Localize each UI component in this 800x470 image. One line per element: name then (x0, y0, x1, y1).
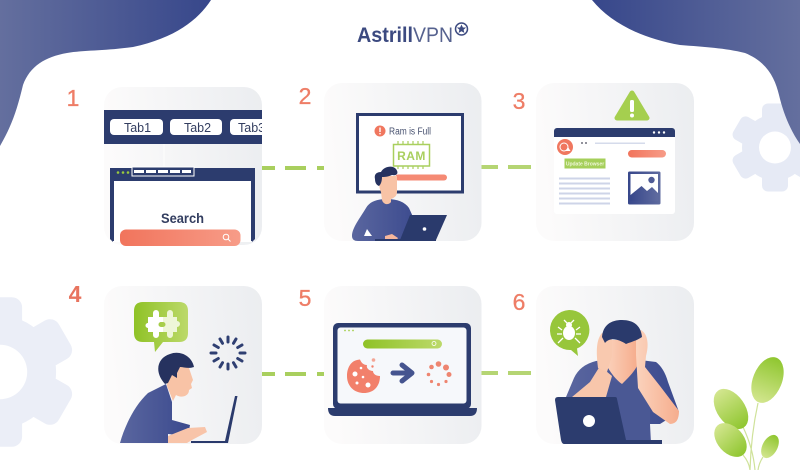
panel 3: update browser warning (536, 83, 694, 241)
logo: Astrill (357, 23, 413, 47)
left gear (0, 297, 76, 447)
number 4: 4 (69, 281, 82, 307)
logo: VPN (413, 23, 453, 47)
panel 2: RAM is full (324, 83, 482, 241)
logo (357, 23, 468, 47)
RAM chip: RAM (397, 149, 426, 163)
laptop (555, 397, 662, 444)
right gear (730, 104, 800, 192)
browser window (554, 128, 675, 214)
cookie (347, 358, 380, 393)
puzzle speech bubble (134, 302, 188, 352)
laptop (375, 215, 447, 241)
panel 1: browser tabs and search (104, 87, 265, 246)
number 6: 6 (513, 289, 525, 315)
panel 6: frustrated user with bug (536, 286, 694, 444)
connector dashes 2 to 3 (481, 165, 531, 169)
frustrated person (555, 320, 679, 444)
browser window (110, 167, 255, 242)
browser window: Search (161, 210, 204, 226)
bug speech bubble (550, 310, 589, 356)
plant (707, 352, 790, 470)
warning triangle (617, 93, 647, 118)
leaves (707, 352, 790, 463)
connector dashes 5 to 6 (481, 371, 531, 375)
tab bar: Tab2 (184, 121, 211, 135)
number 3: 3 (513, 88, 525, 114)
laptop (191, 396, 238, 443)
connector dashes 1 to 2 (262, 166, 324, 170)
number 1: 1 (67, 85, 79, 111)
person typing (120, 353, 238, 443)
green search bar (363, 340, 442, 348)
connector dashes 4 to 5 (262, 372, 324, 376)
image icon (628, 172, 660, 204)
top-left blob (0, 0, 211, 146)
top-right blob (592, 0, 800, 144)
logo star badge (456, 23, 468, 35)
panel 5: clear cookies laptop (324, 286, 482, 444)
person at laptop (352, 167, 447, 241)
number 2: 2 (299, 83, 311, 109)
loading dots (427, 361, 452, 386)
tab bar: Tab3 (238, 121, 265, 135)
laptop (328, 323, 477, 416)
search bar (120, 230, 240, 246)
panel 4: extensions and loading (104, 286, 262, 444)
loading spinner (211, 337, 245, 369)
number 5: 5 (299, 285, 311, 311)
monitor: Ram is Full (389, 126, 431, 138)
update browser button: Update Browser (566, 162, 604, 168)
tab bar: Tab1 (124, 121, 151, 135)
tab bar (104, 110, 265, 144)
RAM chip (394, 141, 430, 169)
arrow (393, 365, 412, 381)
monitor (358, 114, 462, 192)
